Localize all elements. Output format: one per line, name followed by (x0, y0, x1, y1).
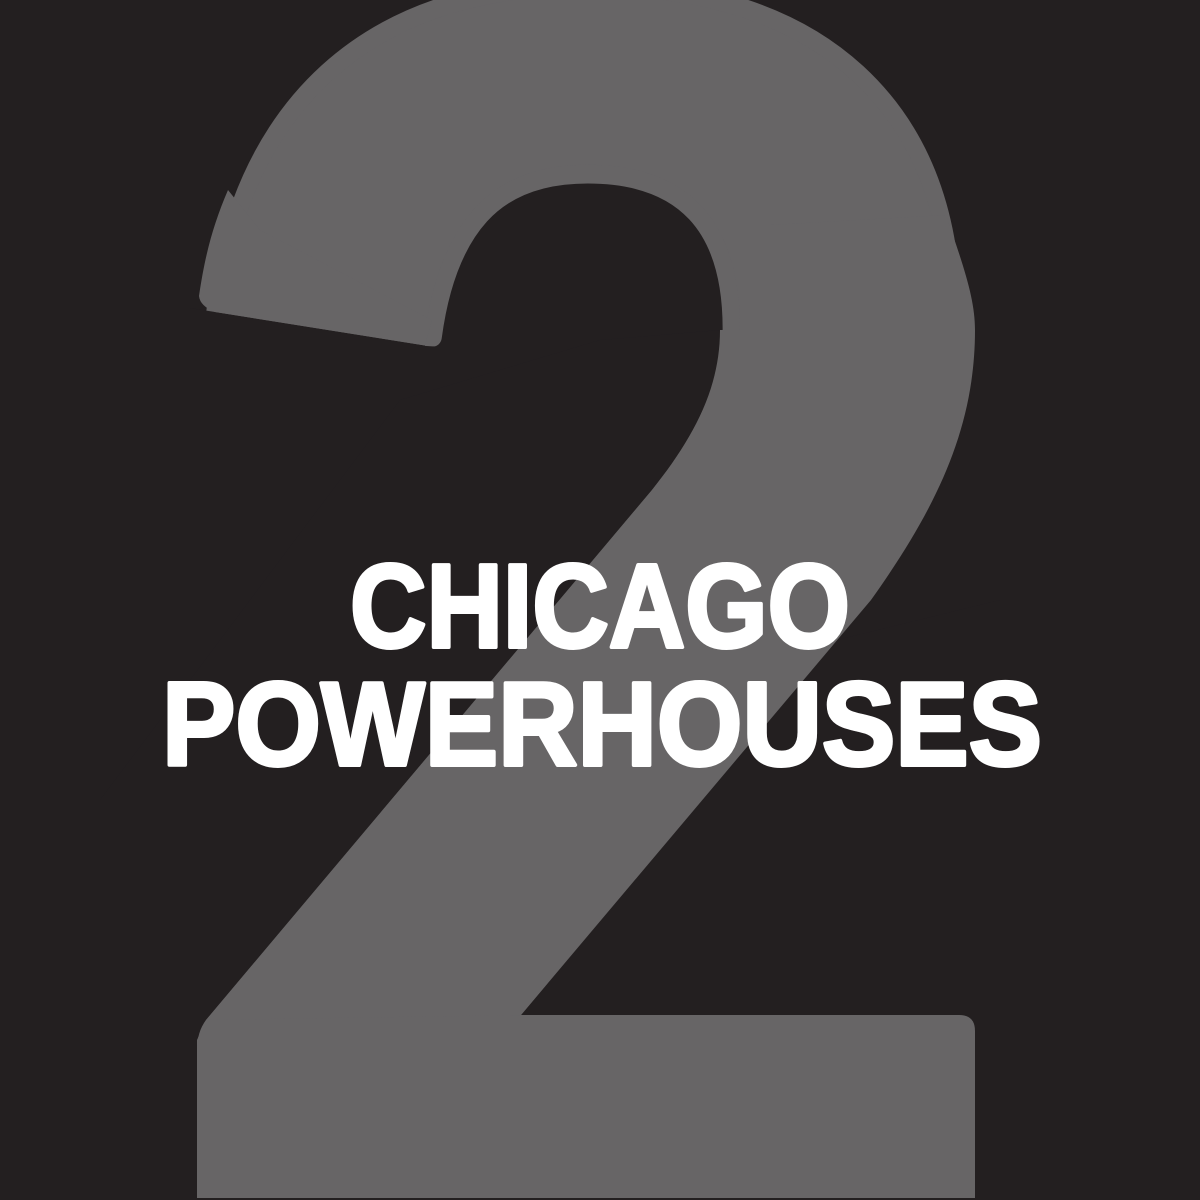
title (162, 540, 1042, 791)
title line 2: POWERHOUSES (162, 658, 1042, 791)
title line 1: CHICAGO (350, 540, 850, 673)
